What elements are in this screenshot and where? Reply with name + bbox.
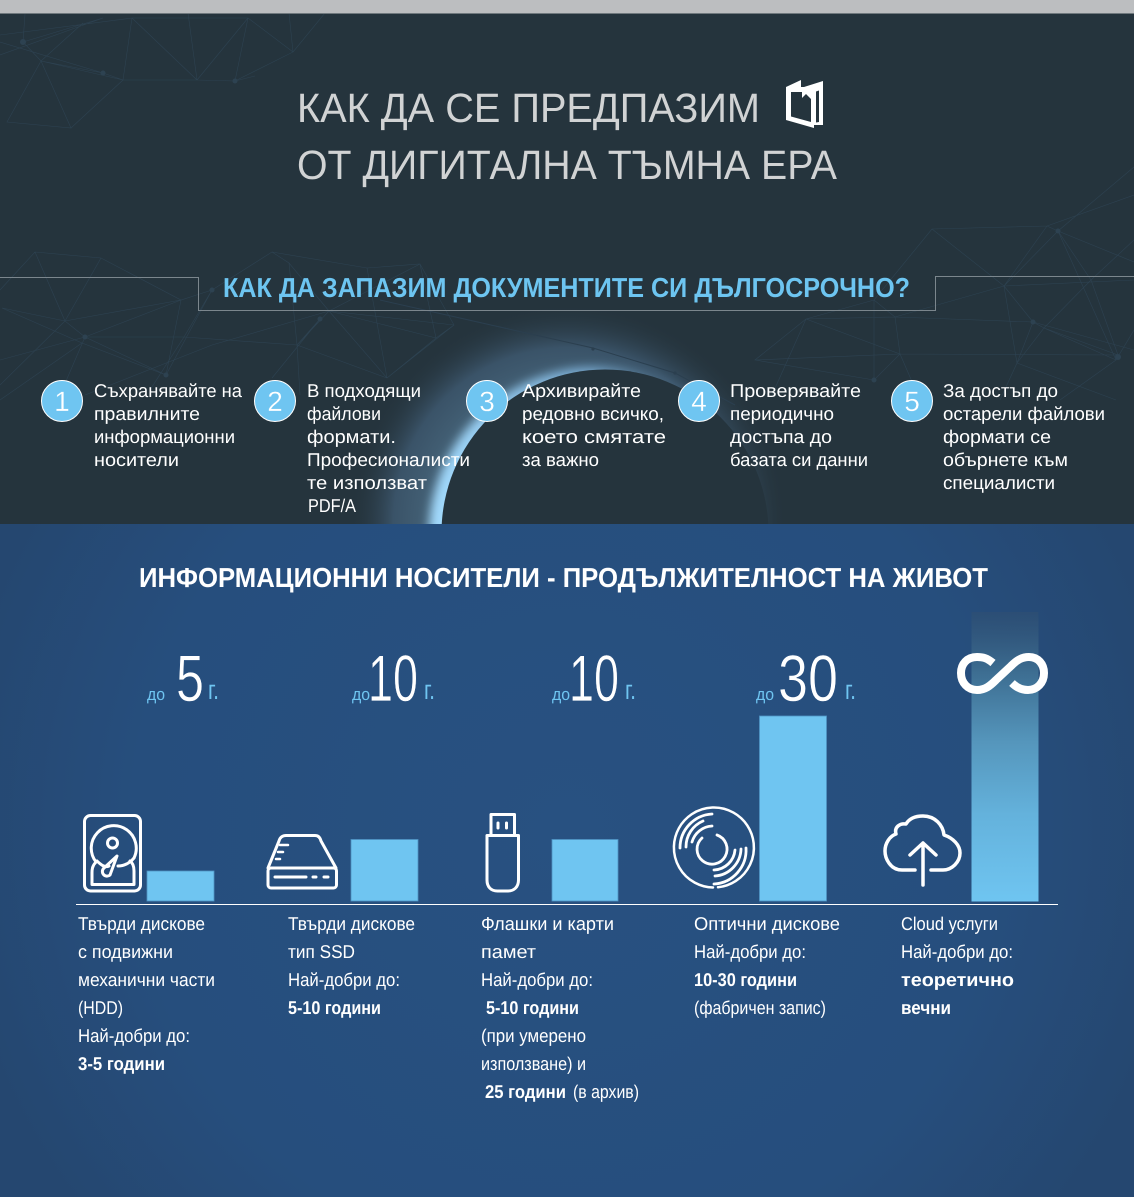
step 5: За достъп до: [943, 380, 1058, 401]
icon: USB flash: [487, 814, 518, 891]
step 2: Професионалисти: [307, 449, 470, 470]
text: flash: [481, 913, 639, 1102]
text: optical: (фабричен запис): [694, 997, 826, 1018]
text: optical: Оптични дискове: [694, 913, 840, 934]
step 1: правилните: [94, 403, 200, 424]
icon: cloud upload: [885, 816, 960, 885]
value: up to 5 years: 5: [176, 641, 204, 715]
icon: optical disc: [674, 808, 754, 888]
section heading: lifespan: ИНФОРМАЦИОННИ НОСИТЕЛИ - ПРОДЪЛЖИТЕЛНОСТ НА ЖИВОТ: [139, 562, 988, 593]
step 3: [466, 380, 666, 470]
step 4: 4: [691, 386, 707, 417]
title: ОТ ДИГИТАЛНА ТЪМНА ЕРА: [297, 142, 838, 188]
text: flash: 5-10 години: [486, 997, 579, 1018]
text: cloud: вечни: [901, 997, 951, 1018]
bar chart: media lifespan: [147, 612, 1038, 902]
background network pattern: [0, 13, 1134, 400]
text: hard disks: 3-5 години: [78, 1053, 165, 1074]
step 5: 5: [904, 386, 920, 417]
text: flash: памет: [481, 941, 537, 962]
step 2: В подходящи: [307, 380, 421, 401]
step 4: достъпа до: [730, 426, 832, 447]
value: up to 5 years: [147, 641, 219, 715]
text: optical: Най-добри до:: [694, 941, 806, 962]
text: SSD: Твърди дискове: [288, 913, 415, 934]
step 5: [892, 380, 1105, 493]
value: up to 30 years: г.: [845, 675, 856, 705]
value: up to 10 years: 10: [368, 641, 418, 715]
step 5: формати се: [943, 426, 1051, 447]
text: cloud: теоретично: [901, 969, 1014, 990]
text: hard disks: механични части: [78, 969, 215, 990]
step 2: PDF/A: [308, 495, 357, 516]
step 1: [42, 380, 243, 470]
value: up to 5 years: до: [147, 685, 165, 704]
value: up to 10 years: до: [352, 685, 370, 704]
step 2: те използват: [307, 472, 428, 493]
step 2: файлови: [307, 403, 381, 424]
value: up to 10 years flash: г.: [625, 675, 636, 705]
text: flash: (в архив): [573, 1081, 639, 1102]
panel: dark header background: [0, 14, 1134, 524]
text: hard disks: (HDD): [78, 997, 123, 1018]
title: КАК ДА СЕ ПРЕДПАЗИМ: [297, 85, 760, 131]
value: up to 5 years: г.: [208, 675, 219, 705]
icon: infinity: [961, 657, 1044, 690]
text: hard disks: Най-добри до:: [78, 1025, 190, 1046]
step 5: остарели файлови: [943, 403, 1105, 424]
step 1: носители: [94, 449, 179, 470]
text: SSD: 5-10 години: [288, 997, 381, 1018]
text: cloud: [901, 913, 1014, 1018]
step 3: за важно: [522, 449, 599, 470]
text: optical: 10-30 години: [694, 969, 797, 990]
text: flash: 25 години: [485, 1081, 566, 1102]
text: hard disks: Твърди дискове: [78, 913, 205, 934]
step 2: формати.: [307, 426, 396, 447]
text: optical: [694, 913, 840, 1018]
top grey band: [0, 0, 1134, 14]
text: hard disks: с подвижни: [78, 941, 173, 962]
step 1: 1: [54, 386, 70, 417]
step 3: което смятате: [522, 426, 666, 447]
step 3: редовно всичко,: [522, 403, 664, 424]
step 5: специалисти: [943, 472, 1055, 493]
step 3: Архивирайте: [522, 380, 641, 401]
value: up to 30 years: до: [756, 685, 774, 704]
text: cloud: Cloud услуги: [901, 913, 998, 934]
text: flash: Най-добри до:: [481, 969, 593, 990]
text: SSD: Най-добри до:: [288, 969, 400, 990]
step 1: Съхранявайте на: [94, 380, 243, 401]
text: flash: използване) и: [481, 1053, 586, 1074]
step 4: периодично: [730, 403, 834, 424]
icon: open book: [786, 80, 823, 128]
step 5: обърнете към: [943, 449, 1068, 470]
value: up to 30 years: 30: [778, 641, 838, 715]
value: up to 10 years: г.: [424, 675, 435, 705]
section heading: documents: КАК ДА ЗАПАЗИМ ДОКУМЕНТИТЕ СИ ДЪЛГОСРОЧНО?: [223, 272, 910, 303]
text: cloud: Най-добри до:: [901, 941, 1013, 962]
heading frame: [0, 276, 1134, 310]
step 4: Проверявайте: [730, 380, 861, 401]
text: SSD: тип SSD: [288, 941, 355, 962]
value: up to 10 years flash: до: [552, 685, 570, 704]
text: flash: (при умерено: [481, 1025, 586, 1046]
step 4: базата си данни: [730, 449, 868, 470]
text: flash: Флашки и карти: [481, 913, 614, 934]
step 1: информационни: [94, 426, 235, 447]
title: [297, 85, 838, 188]
panel: blue lifespan background: [0, 524, 1134, 1197]
step 4: [678, 380, 868, 470]
glowing horizon arc: [369, 300, 766, 524]
icon: hard disk: [84, 816, 140, 891]
text: hard disks: [78, 913, 215, 1074]
step 2: [254, 380, 470, 516]
value: up to 10 years flash: 10: [569, 641, 619, 715]
step 2: 2: [267, 386, 283, 417]
baseline: [76, 904, 1058, 905]
step 3: 3: [479, 386, 495, 417]
text: SSD: [288, 913, 415, 1018]
icon: SSD drive: [268, 836, 336, 888]
